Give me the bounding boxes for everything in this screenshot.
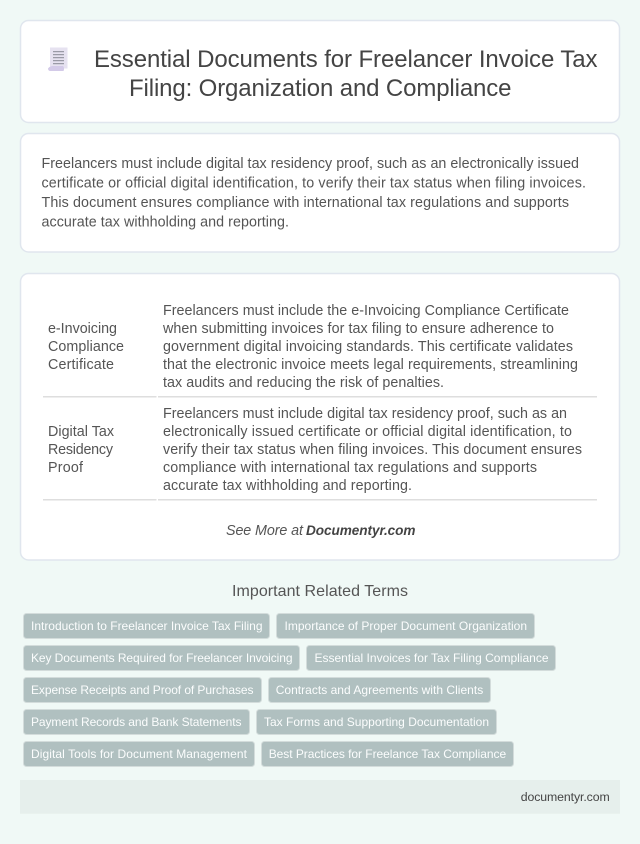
tag: Key Documents Required for Freelancer Invoicing [31,651,292,665]
text block: summary: Freelancers must include digital tax residency proof, such as an electronically issued [42,156,579,172]
row label [48,424,114,476]
footer [20,780,620,814]
table row: Digital Tax Residency Proof [43,406,597,500]
tag: Introduction to Freelancer Invoice Tax Filing [31,619,262,633]
tag [262,742,514,766]
row label: Residency [48,442,114,458]
link: see more: Documentyr.com [306,523,416,538]
tag: Payment Records and Bank Statements [31,715,242,729]
title: Essential Documents for Freelancer Invoice Tax [94,46,598,73]
footer: documentyr.com [521,790,610,804]
row description: tax audits and reducing the risk of penalties. [163,375,444,391]
icon: receipt document [48,48,68,71]
tag [24,646,300,670]
panel: summary paragraph [20,134,620,252]
row label: e-Invoicing [48,321,117,337]
row description: verify their tax status when filing invoices. This document ensures [163,442,582,458]
row description: compliance with international tax regulations and supports [163,460,537,476]
row description [163,406,582,494]
tag [276,614,534,638]
row description: accurate tax withholding and reporting. [163,478,412,494]
title: Filing: Organization and Compliance [129,75,512,102]
text block: summary: accurate tax withholding and reporting. [42,214,289,230]
row label: Certificate [48,357,114,373]
tag: Importance of Proper Document Organization [284,619,527,633]
row description: that the electronic invoice meets legal requirements, streamlining [163,357,578,373]
row description: electronically issued certificate or official digital identification, to [163,424,572,440]
tag: Contracts and Agreements with Clients [276,683,483,697]
text block: summary: certificate or official digital identification, to verify their tax status when filing invoices. [42,176,586,192]
row label: Compliance [48,339,124,355]
row description: when submitting invoices for tax filing to ensure adherence to [162,321,554,337]
text block: summary: This document ensures compliance with international tax regulations and supports [42,195,569,211]
tag [24,742,254,766]
text block: summary [42,156,586,230]
row label [48,321,124,373]
tag: Expense Receipts and Proof of Purchases [31,683,254,697]
tag [24,678,262,702]
tag: Digital Tools for Document Management [31,747,248,761]
tag [24,710,250,734]
row description: Freelancers must include the e-Invoicing Compliance Certificate [163,303,569,319]
link: see more: See More at [226,523,304,539]
tag: Tax Forms and Supporting Documentation [264,715,489,729]
panel: documents table [20,274,620,560]
row description: government digital invoicing standards. This certificate validates [163,339,573,355]
row description [162,303,578,391]
tag list: related terms [24,614,556,766]
tag [24,614,270,638]
tag: Essential Invoices for Tax Filing Compliance [314,651,549,665]
title [94,46,598,102]
row label: Digital Tax [48,424,114,440]
panel: title card [20,20,620,122]
table row: e-Invoicing Compliance Certificate [43,303,597,398]
tag: Best Practices for Freelance Tax Compliance [269,747,507,761]
row label: Proof [48,460,83,476]
row description: Freelancers must include digital tax residency proof, such as an [163,406,567,422]
tag [256,710,496,734]
tag [268,678,490,702]
heading: important related terms: Important Related Terms [232,583,408,600]
tag [306,646,556,670]
link: see more [226,523,416,539]
